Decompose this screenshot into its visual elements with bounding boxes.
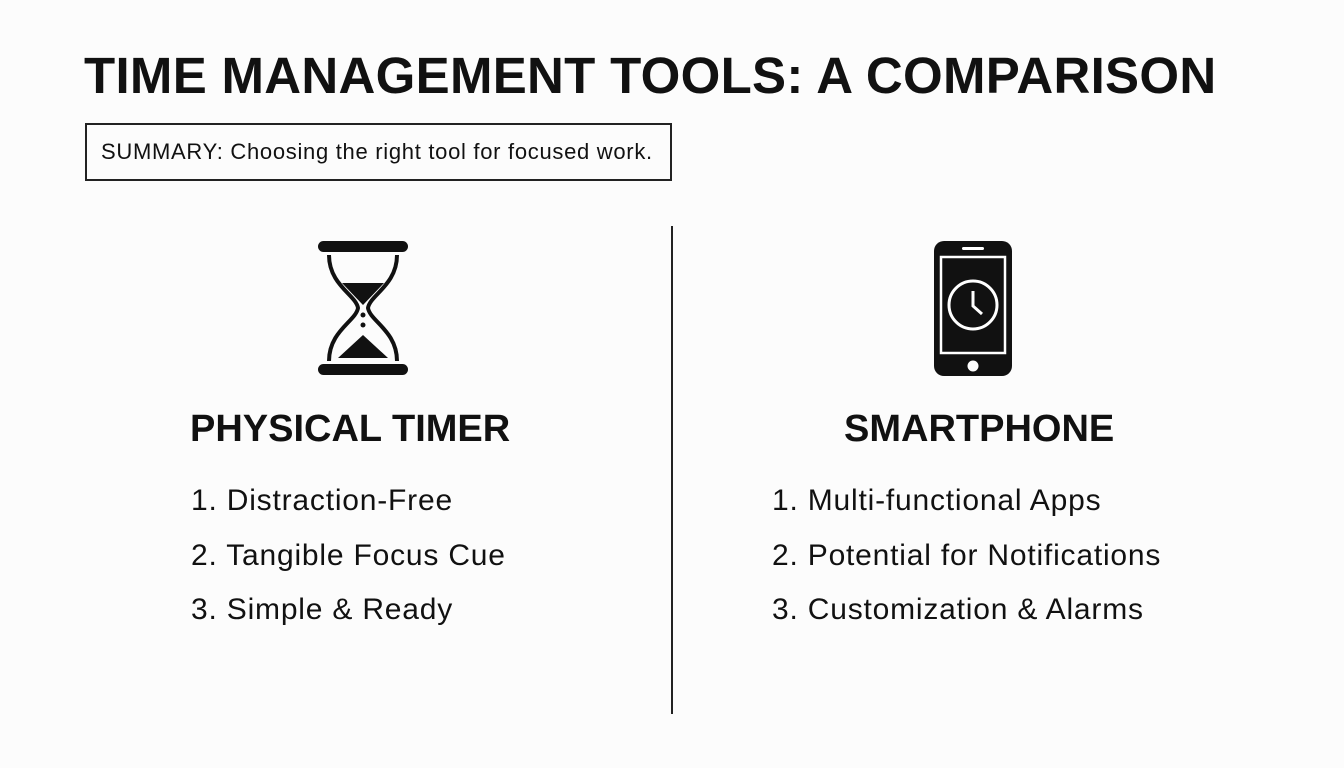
list: physical timer: 1. Distraction-Free (191, 484, 453, 517)
icon: smartphone (934, 241, 1012, 376)
heading: smartphone: SMARTPHONE (844, 408, 1114, 450)
heading: physical timer: PHYSICAL TIMER (190, 408, 510, 450)
list: physical timer: 2. Tangible Focus Cue (191, 538, 506, 572)
summary box (85, 123, 672, 181)
title: TIME MANAGEMENT TOOLS: A COMPARISON (84, 47, 1216, 104)
list: smartphone: 2. Potential for Notifications (772, 538, 1161, 572)
list: smartphone (772, 484, 1161, 626)
divider (671, 226, 673, 714)
list: physical timer (191, 484, 506, 626)
list: smartphone: 3. Customization & Alarms (772, 593, 1144, 626)
icon: hourglass (318, 241, 408, 375)
list: smartphone: 1. Multi-functional Apps (772, 484, 1101, 517)
summary box: SUMMARY: Choosing the right tool for focused work. (101, 139, 653, 164)
list: physical timer: 3. Simple & Ready (191, 593, 453, 626)
